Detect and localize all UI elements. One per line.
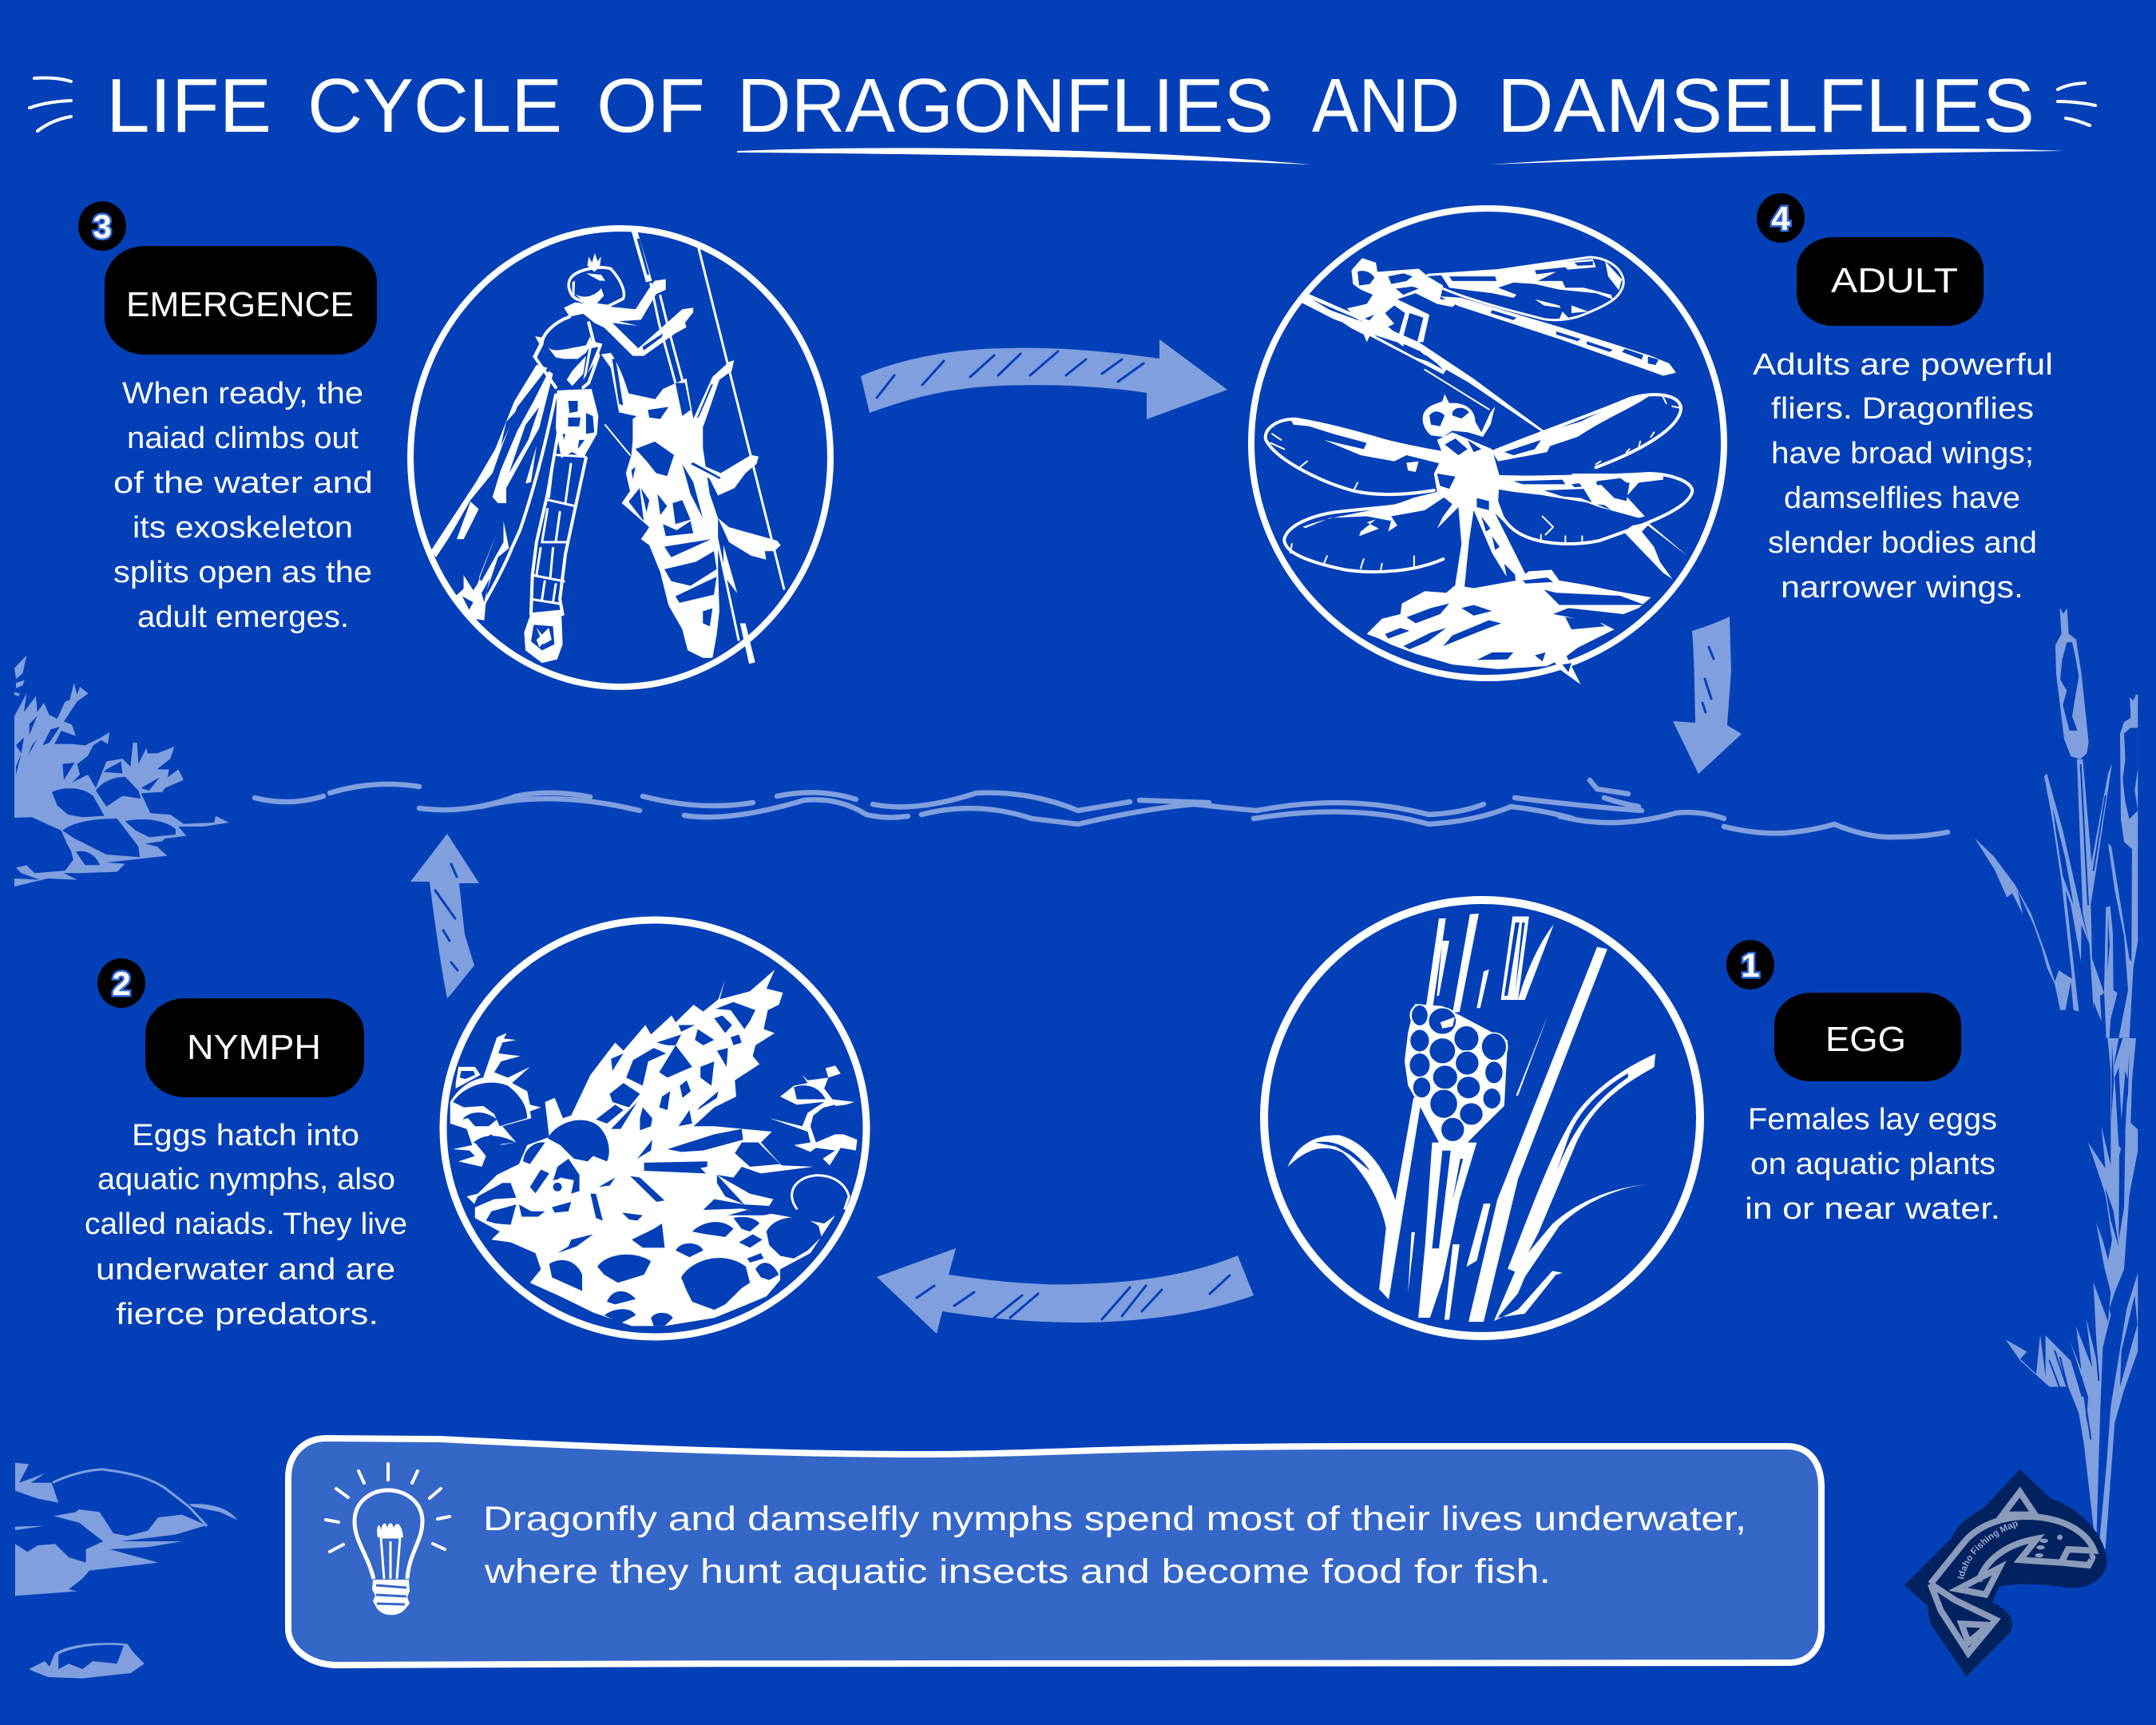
title: OF xyxy=(596,63,705,149)
adult head xyxy=(569,268,624,306)
right rocks xyxy=(769,1065,857,1165)
step 1 badge xyxy=(1726,940,1774,989)
rock xyxy=(1367,569,1651,669)
panel: egg illustration xyxy=(1264,900,1700,1336)
step 3 label xyxy=(105,246,377,355)
thorax xyxy=(535,317,598,387)
step 2 text: Eggs hatch into xyxy=(132,1119,359,1152)
step 4 text: narrower wings. xyxy=(1781,571,2023,605)
egg mass xyxy=(1405,1004,1508,1151)
decorative cattails, right edge lower xyxy=(2006,1038,2138,1549)
step 3 text: splits open as the xyxy=(113,556,372,589)
title accent marks right xyxy=(2058,83,2095,125)
title xyxy=(106,63,2035,149)
step 3 text: adult emerges. xyxy=(137,601,349,634)
logo: Idaho Fishing Map: Idaho Fishing Map xyxy=(1958,1521,2018,1580)
circle frame: nymph xyxy=(443,920,866,1337)
arrow: nymph to emergence xyxy=(410,834,479,998)
step 3 text: its exoskeleton xyxy=(133,511,353,545)
panel: nymph illustration xyxy=(443,920,866,1337)
step 4 text xyxy=(1753,348,2053,605)
exuvia xyxy=(622,379,719,658)
callout text xyxy=(483,1500,1746,1591)
step 2 badge: 2 xyxy=(112,965,131,1002)
circle frame: adult xyxy=(1251,208,1724,678)
step 3 label: EMERGENCE xyxy=(126,285,354,324)
illustration: nymph among rocks xyxy=(450,970,857,1326)
step 2 text: aquatic nymphs, also xyxy=(97,1163,395,1196)
title: DAMSELFLIES xyxy=(1497,63,2035,149)
step 1 text: on aquatic plants xyxy=(1750,1148,1995,1181)
step 2 label: NYMPH xyxy=(187,1028,321,1067)
step 3 badge: 3 xyxy=(93,208,112,245)
panel: emergence illustration xyxy=(410,228,830,687)
callout text: Dragonfly and damselfly nymphs spend most of their lives underwater, xyxy=(483,1500,1746,1538)
step 1 label xyxy=(1774,993,1961,1081)
illustration: dragonfly emerging from exoskeleton xyxy=(430,231,784,664)
step 3 badge xyxy=(78,201,126,251)
title: DRAGONFLIES xyxy=(737,63,1274,149)
decorative bush and rocks, upper left xyxy=(14,656,229,886)
wings xyxy=(430,365,548,557)
title: CYCLE xyxy=(307,63,562,149)
arrow: adult to egg xyxy=(1673,617,1742,774)
rocks at bottom xyxy=(549,1217,822,1326)
big dragonfly wings xyxy=(1266,419,1453,494)
step 4 badge: 4 xyxy=(1771,200,1790,237)
step 4 text: have broad wings; xyxy=(1771,437,2034,470)
illustration: damselfly and dragonfly xyxy=(1266,257,1692,684)
circle frame: egg xyxy=(1264,900,1700,1336)
abdomen tip xyxy=(524,610,563,663)
abdomen xyxy=(556,389,598,458)
step 4 text: Adults are powerful xyxy=(1753,348,2053,382)
step 4 badge xyxy=(1757,193,1805,243)
logo: Idaho Fishing Map xyxy=(1904,1469,2107,1677)
exuvia legs xyxy=(693,360,734,447)
prothorax and upper legs xyxy=(564,280,666,329)
step 4 text: slender bodies and xyxy=(1768,526,2037,560)
step 4 label: ADULT xyxy=(1831,261,1958,300)
water line xyxy=(255,780,1948,837)
step 3 text xyxy=(113,377,373,634)
step 2 badge xyxy=(97,958,145,1008)
step 2 text: fierce predators. xyxy=(116,1298,378,1331)
title: LIFE xyxy=(106,63,271,149)
circle frame: emergence xyxy=(410,228,830,687)
step 1 label: EGG xyxy=(1825,1020,1906,1059)
title underline xyxy=(737,148,2064,165)
decorative rocks, lower left xyxy=(15,1463,237,1596)
step 3 text: When ready, the xyxy=(122,377,363,410)
icon: light bulb xyxy=(326,1464,450,1615)
decorative cattails, right edge upper xyxy=(1975,608,2138,1038)
step 2 text xyxy=(85,1119,407,1331)
damselfly head and thorax xyxy=(1347,258,1461,347)
damselfly abdomen xyxy=(1440,296,1676,375)
stems xyxy=(632,231,652,282)
twig xyxy=(1298,293,1544,432)
step 2 label xyxy=(145,998,364,1097)
panel: adult illustration xyxy=(1251,208,1724,684)
step 2 text: called naiads. They live xyxy=(85,1208,407,1241)
step 3 text: of the water and xyxy=(113,466,373,500)
left rocks xyxy=(450,1033,541,1167)
step 1 text: in or near water. xyxy=(1745,1192,2000,1226)
decorative small rock, lower left xyxy=(29,1643,145,1679)
step 4 text: fliers. Dragonflies xyxy=(1771,392,2034,426)
step 4 text: damselflies have xyxy=(1784,482,2020,515)
illustration: egg cluster on reeds xyxy=(1288,914,1655,1322)
step 4 label xyxy=(1797,237,1984,326)
step 2 text: underwater and are xyxy=(96,1253,395,1287)
title accent marks left xyxy=(30,78,71,131)
damselfly wing xyxy=(1428,257,1623,320)
dragonfly head xyxy=(1423,394,1495,437)
step 1 text xyxy=(1745,1103,2000,1226)
step 1 text: Females lay eggs xyxy=(1748,1103,1997,1136)
callout text: where they hunt aquatic insects and become food for fish. xyxy=(484,1552,1551,1591)
arrow: emergence to adult xyxy=(861,339,1227,419)
step 1 badge: 1 xyxy=(1741,946,1760,984)
step 3 text: naiad climbs out xyxy=(127,422,359,455)
title: AND xyxy=(1312,63,1460,149)
arrow: egg to nymph xyxy=(877,1248,1254,1334)
callout panel xyxy=(288,1438,1821,1665)
